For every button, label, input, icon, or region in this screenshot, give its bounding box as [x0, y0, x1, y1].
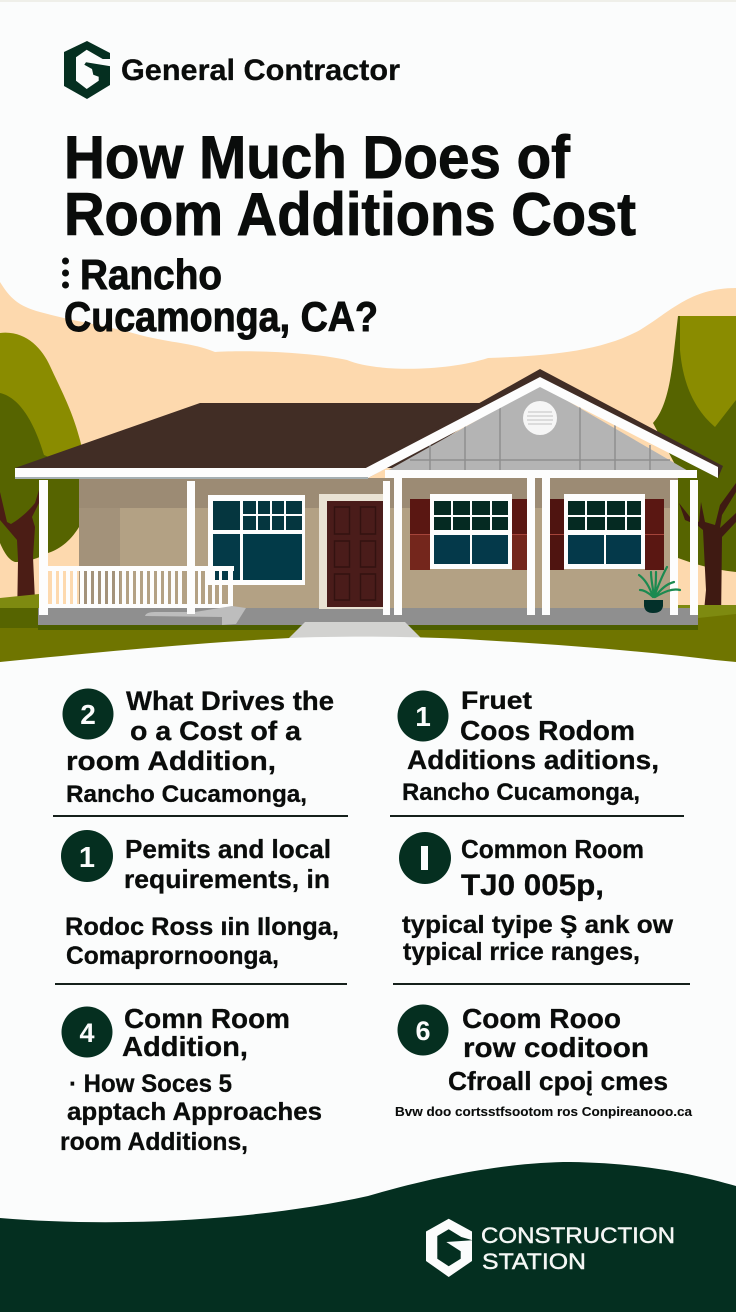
logo icon [64, 41, 110, 99]
item text: TJ0 005p, [461, 869, 604, 902]
number badge 2 [62, 688, 114, 740]
item: common room types [399, 832, 674, 966]
number badge 6: 6 [415, 1016, 431, 1046]
item text: Coos Rodom [460, 715, 635, 746]
porch step [145, 606, 246, 625]
title: How Much Does of [64, 124, 571, 191]
item: room addition approaches [60, 1003, 322, 1156]
porch posts [39, 478, 698, 615]
window right with shutters [550, 494, 664, 570]
number badge 1: 1 [79, 842, 95, 874]
door [319, 494, 383, 609]
item text [402, 687, 659, 806]
lawn [0, 594, 736, 662]
footer logo icon [426, 1219, 472, 1277]
item text: Additions aditions, [407, 745, 659, 775]
number badge 1 [61, 830, 113, 882]
item text: Common Room [461, 834, 644, 864]
railing [47, 566, 234, 608]
item text [395, 1003, 693, 1119]
house [15, 369, 723, 639]
gable roof edge [360, 369, 723, 478]
item text [60, 1003, 322, 1156]
item text: Comaprornoonga, [66, 942, 279, 970]
window centre with shutters [410, 494, 527, 570]
gable siding [385, 385, 690, 472]
walkway [288, 622, 422, 639]
number badge I [399, 832, 451, 884]
title [62, 124, 636, 340]
number badge 4: 4 [79, 1018, 95, 1048]
title: Cucamonga, CA? [64, 293, 378, 340]
number badge 4 [62, 1006, 112, 1058]
footer brand name: STATION [482, 1249, 586, 1274]
item text: Comn Room [124, 1003, 290, 1034]
porch slab [38, 608, 698, 625]
item text: Rancho Cucamonga, [402, 779, 640, 806]
white lower panel [0, 637, 736, 1200]
item text: requirements, in [124, 864, 330, 894]
logo: General Contractor [64, 41, 400, 99]
background hills [0, 282, 736, 610]
item text: Addition, [122, 1031, 248, 1062]
item text: · How Soces 5 [69, 1070, 232, 1098]
item text: apptach Approaches [67, 1098, 322, 1126]
window left [208, 495, 305, 585]
item text: Pemits and local [125, 834, 331, 864]
item text [402, 834, 674, 966]
item text: Coom Rooo [462, 1003, 621, 1034]
item text: row coditoon [463, 1032, 649, 1063]
brand name: General Contractor [121, 54, 400, 87]
main roof [15, 403, 500, 468]
right beam [385, 470, 697, 478]
item: what drives the cost [62, 686, 334, 808]
item: room additions [398, 687, 659, 806]
title: Rancho [80, 251, 222, 298]
wall [79, 478, 678, 608]
number badge 2: 2 [80, 699, 96, 730]
item text: room Addition, [66, 746, 276, 776]
right tree [653, 316, 736, 623]
potted plant [639, 567, 680, 613]
item text: typical rrice ranges, [403, 938, 640, 966]
item text: Cfroall cpoį cmes [448, 1066, 668, 1096]
item text: room Additions, [60, 1128, 248, 1156]
number badge 1: 1 [415, 701, 431, 732]
footer band [0, 1162, 736, 1312]
item text: o a Cost of a [130, 716, 302, 746]
item text: Rodoc Ross ıin Ilonga, [65, 913, 339, 941]
item text: typical tyipe Ş ank ow [402, 911, 674, 939]
number badge 1 [398, 690, 448, 742]
item: permits [61, 830, 339, 970]
left fascia [15, 468, 368, 479]
item text [65, 834, 339, 970]
number badge 6 [398, 1004, 448, 1056]
gable vent [523, 401, 557, 435]
item text [66, 686, 334, 808]
item: room addition cost [395, 1003, 693, 1119]
left tree [0, 333, 90, 623]
item text: Rancho Cucamonga, [66, 781, 307, 808]
item text: Bvw doo cortsstfsootom ros Conpireanooo.ca [395, 1104, 693, 1119]
item text: What Drives the [126, 686, 334, 716]
footer brand name [481, 1223, 675, 1274]
title: Room Additions Cost [64, 181, 636, 248]
footer brand name: CONSTRUCTION [481, 1223, 675, 1248]
item text: Fruet [461, 687, 533, 715]
footer logo [426, 1219, 675, 1277]
gable trim [362, 377, 718, 478]
